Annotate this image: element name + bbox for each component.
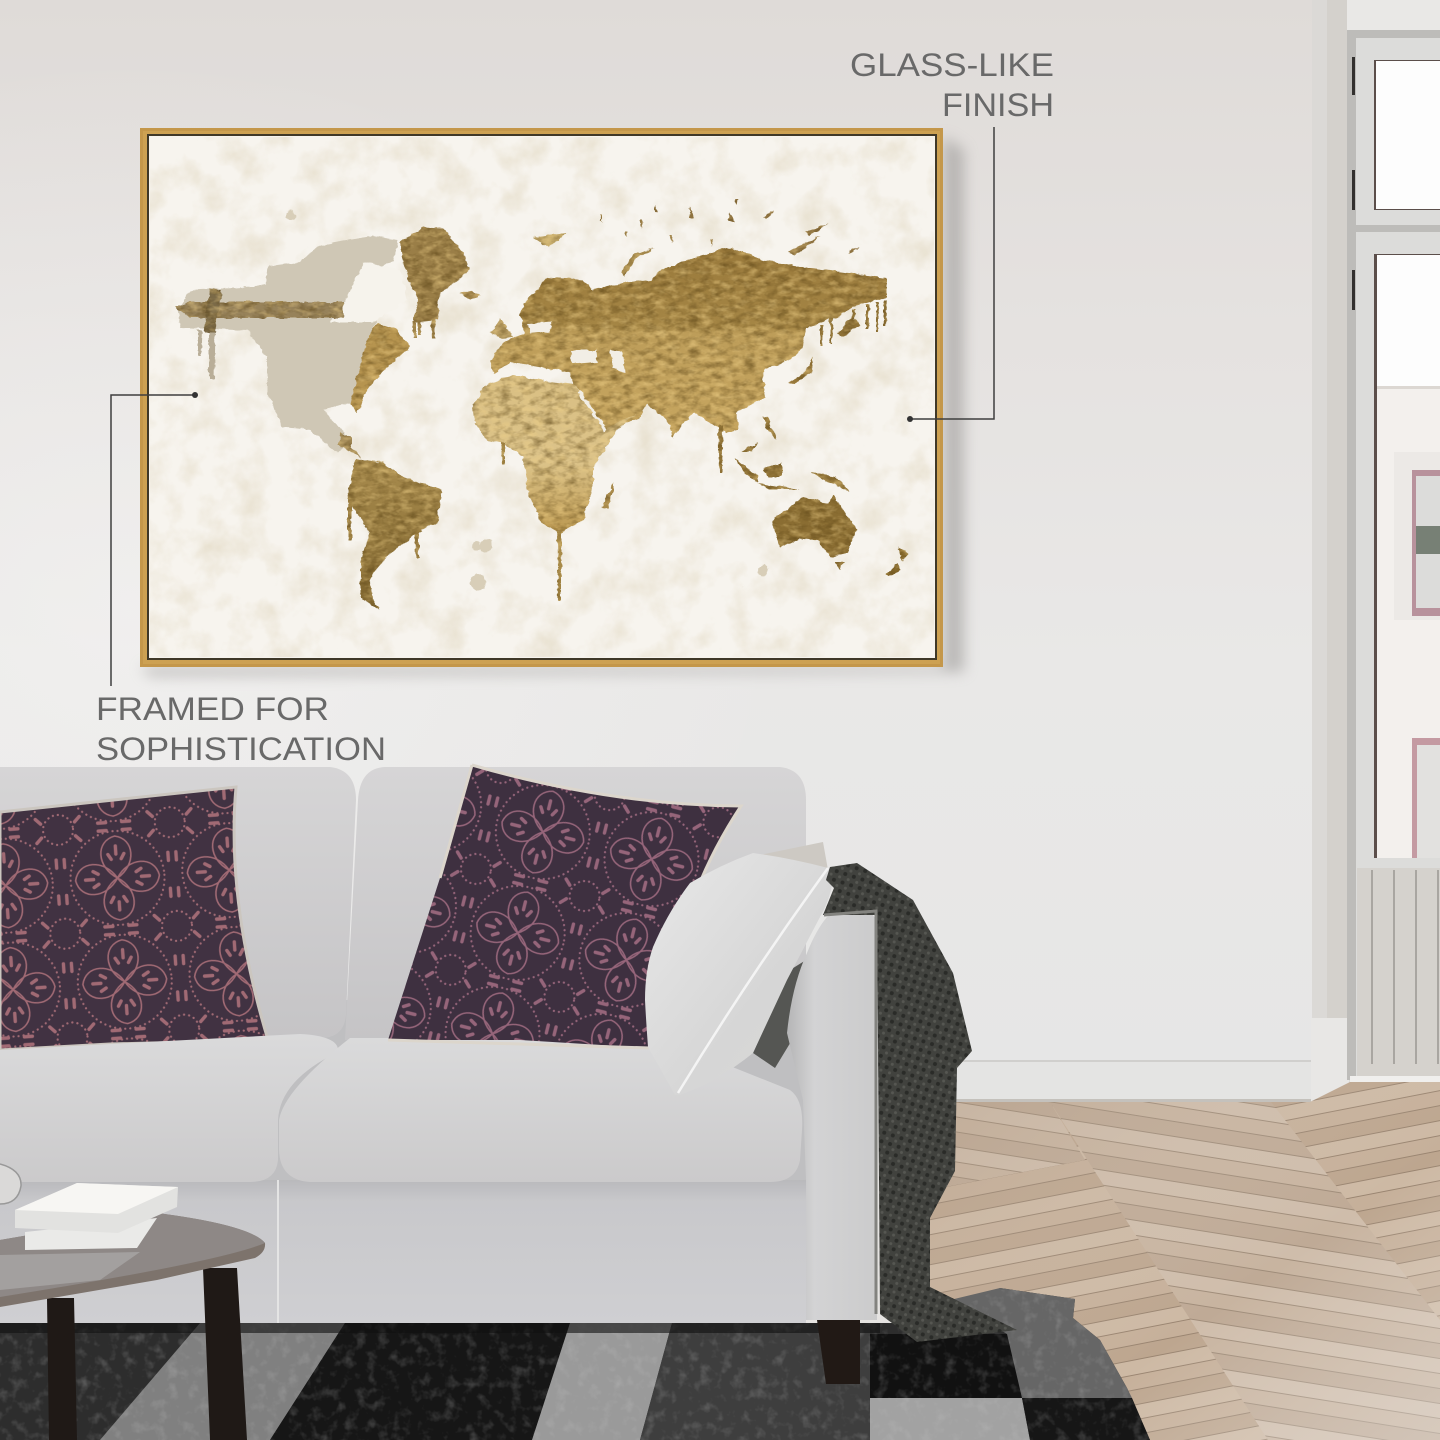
arctic gaps <box>330 262 408 322</box>
callout: framed for sophistication: SOPHISTICATION <box>96 731 386 767</box>
floor <box>930 1082 1440 1440</box>
back cushion right <box>345 767 806 1040</box>
Africa drips <box>501 442 561 602</box>
New Zealand <box>885 547 908 576</box>
Tasmania <box>835 562 845 569</box>
white pillow <box>645 853 833 1095</box>
sofa arm <box>787 912 877 1320</box>
pale areas <box>178 211 768 590</box>
Eurasia <box>490 247 887 437</box>
hinges <box>1352 57 1355 310</box>
Iceland <box>460 290 480 299</box>
label: glass-like finish: GLASS-LIKE <box>850 47 1054 83</box>
seat cushion center <box>279 1038 802 1182</box>
inland seas <box>528 322 624 430</box>
lower book <box>25 1218 157 1250</box>
world map <box>175 198 908 610</box>
Greenland <box>400 227 470 323</box>
callout: glass-like finish: FINISH <box>942 87 1054 123</box>
North America pale <box>178 236 398 453</box>
East US gold <box>350 323 410 413</box>
knit throw <box>823 863 1017 1342</box>
sofa body <box>0 1000 806 1323</box>
Kamchatka <box>837 317 860 337</box>
center pillow piping <box>388 765 741 1048</box>
pillow left <box>0 787 268 1050</box>
Asia drips <box>718 300 887 472</box>
Central America <box>338 433 362 457</box>
view building <box>1377 386 1440 858</box>
callout: glass-like finish <box>850 47 1054 422</box>
Philippines <box>763 417 777 440</box>
seat cushion left <box>0 1034 338 1182</box>
callout: framed for sophistication <box>96 392 386 767</box>
window and door frame <box>1311 0 1440 1102</box>
upper book <box>15 1183 178 1233</box>
Greenland drips <box>412 318 435 338</box>
gold leaf areas <box>175 198 908 610</box>
stains <box>286 211 768 590</box>
wall <box>0 0 1440 1110</box>
Africa <box>473 375 637 533</box>
white pillow shadow <box>753 960 806 1068</box>
rug <box>0 1288 1150 1440</box>
splatter <box>600 198 860 256</box>
window panes <box>1374 60 1440 858</box>
sofa base <box>0 1180 806 1323</box>
label: framed for sophistication: FRAMED FOR <box>96 691 329 727</box>
door panels <box>1357 868 1440 1076</box>
sofa <box>0 765 1017 1384</box>
cross smear <box>204 290 222 332</box>
Spitsbergen <box>533 233 567 247</box>
Japan <box>787 357 813 384</box>
white pillow piping <box>678 868 828 1093</box>
white pillow back flap <box>735 842 828 880</box>
framed artwork <box>140 128 943 667</box>
Indonesia <box>735 442 850 492</box>
artwork drop shadow <box>140 136 964 676</box>
frame <box>140 128 943 667</box>
sofa leg <box>817 1320 860 1384</box>
books <box>15 1183 178 1250</box>
South America drips <box>348 500 419 558</box>
glass <box>0 1164 21 1204</box>
Novaya Zemlya <box>620 248 654 276</box>
back cushion left <box>0 767 356 1038</box>
South America <box>348 458 442 610</box>
canvas <box>149 136 935 658</box>
baseboard <box>940 1060 1315 1102</box>
Australia <box>772 495 857 557</box>
UK <box>490 318 513 338</box>
table top <box>0 1213 265 1307</box>
west drips <box>198 328 215 380</box>
Madagascar <box>602 483 613 508</box>
dark bar <box>175 302 343 318</box>
table legs <box>47 1268 247 1440</box>
pillow center <box>388 765 741 1048</box>
coffee table <box>0 1164 265 1440</box>
